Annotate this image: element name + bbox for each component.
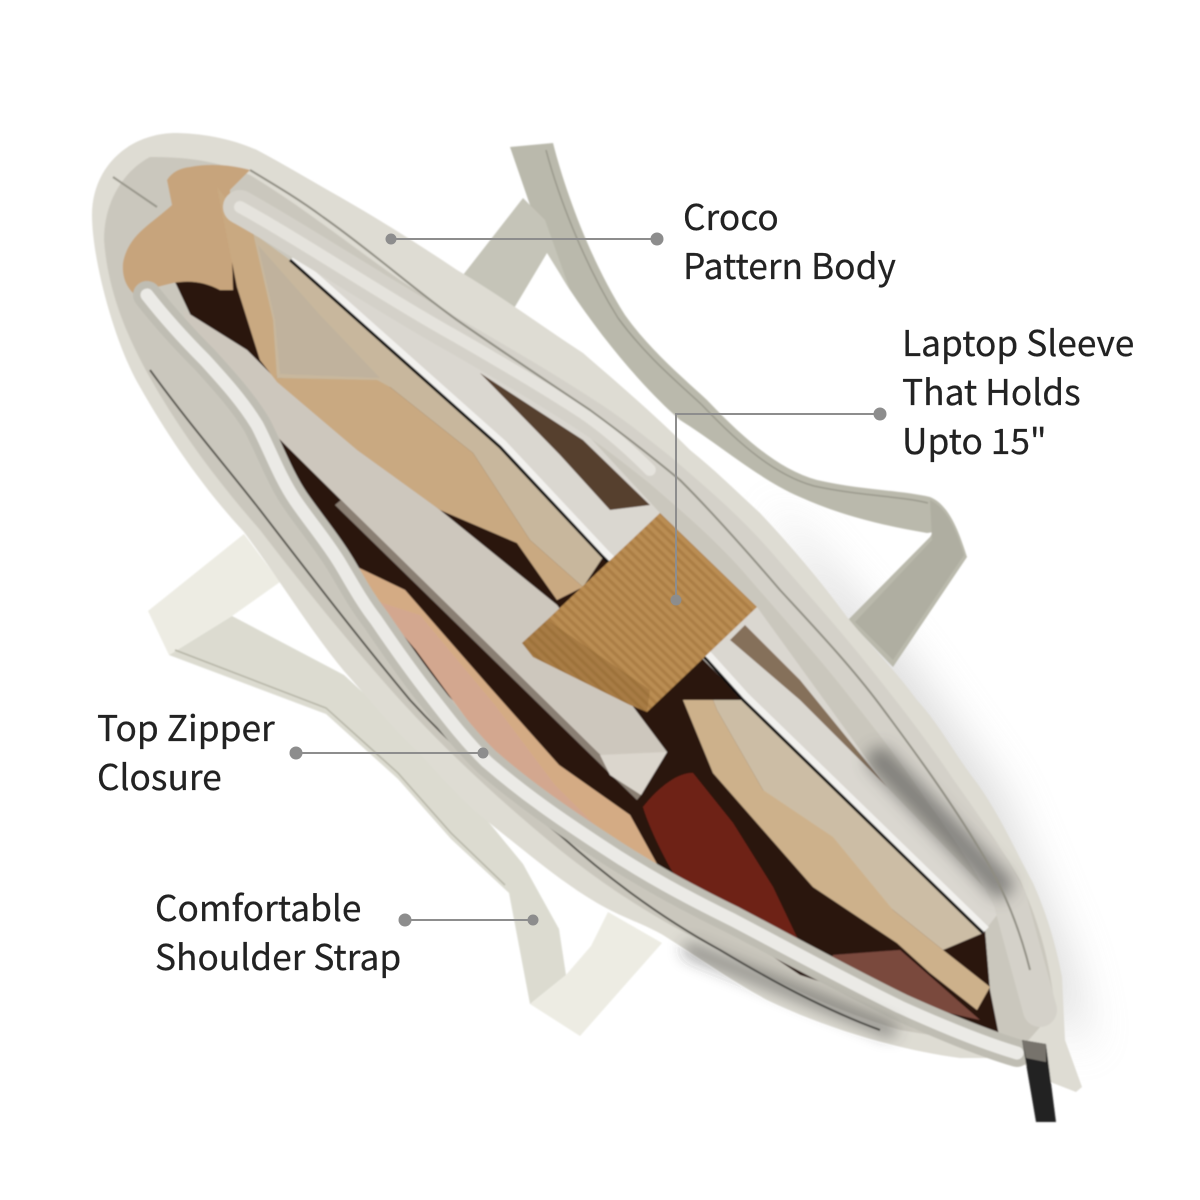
- tan pocket middle: [217, 187, 583, 600]
- lower strap: [148, 534, 662, 1036]
- label: top zipper closure: [97, 701, 275, 801]
- tan pocket lower: [683, 700, 990, 1010]
- label: laptop sleeve: Laptop Sleeve: [902, 316, 1134, 367]
- beige laptop edge: [253, 233, 603, 587]
- elastic band: [522, 513, 757, 712]
- leader: shoulder strap: [400, 914, 538, 926]
- red leather pouch: [643, 773, 803, 950]
- book end page: [600, 752, 667, 795]
- laptop sleeve with zipper: [240, 207, 1040, 1010]
- book spine shade: [335, 500, 641, 800]
- pocket grey inner: [258, 245, 380, 378]
- label: croco pattern body: Croco: [683, 190, 779, 241]
- label: top zipper closure: Closure: [97, 750, 222, 801]
- pink pouch: [330, 554, 673, 893]
- label: laptop sleeve: That Holds: [902, 365, 1081, 416]
- label: comfortable shoulder strap: Comfortable: [155, 881, 362, 932]
- leader: croco pattern: [386, 234, 662, 244]
- leader: top zipper: [290, 748, 488, 758]
- book: [183, 310, 667, 795]
- beige laptop edge lower: [713, 700, 983, 950]
- soft shadow beside bag: [770, 500, 1090, 1050]
- laptop edge lines: [290, 257, 986, 933]
- bag body: [92, 133, 1082, 1092]
- outer seam lines: [113, 170, 1030, 1030]
- label: croco pattern body: Pattern Body: [683, 239, 896, 290]
- label: laptop sleeve: Upto 15": [902, 414, 1047, 465]
- label: comfortable shoulder strap: [155, 881, 401, 981]
- tan pocket top left: [123, 165, 250, 293]
- label: croco pattern body: [683, 190, 896, 290]
- maroon lower pouch: [825, 950, 980, 1020]
- label: top zipper closure: Top Zipper: [97, 701, 275, 752]
- interior lining: [104, 157, 1055, 1050]
- zipper pull: [1022, 1040, 1056, 1122]
- front zipper: [147, 295, 1017, 1053]
- label: comfortable shoulder strap: Shoulder Strap: [155, 930, 401, 981]
- leader: laptop sleeve: [672, 408, 886, 604]
- upper strap: [463, 143, 967, 667]
- dark interior cavity: [175, 230, 1000, 1040]
- laptop surface: [290, 260, 1003, 933]
- sleeve shadow wedges: [480, 373, 887, 787]
- label: laptop sleeve: [902, 316, 1134, 465]
